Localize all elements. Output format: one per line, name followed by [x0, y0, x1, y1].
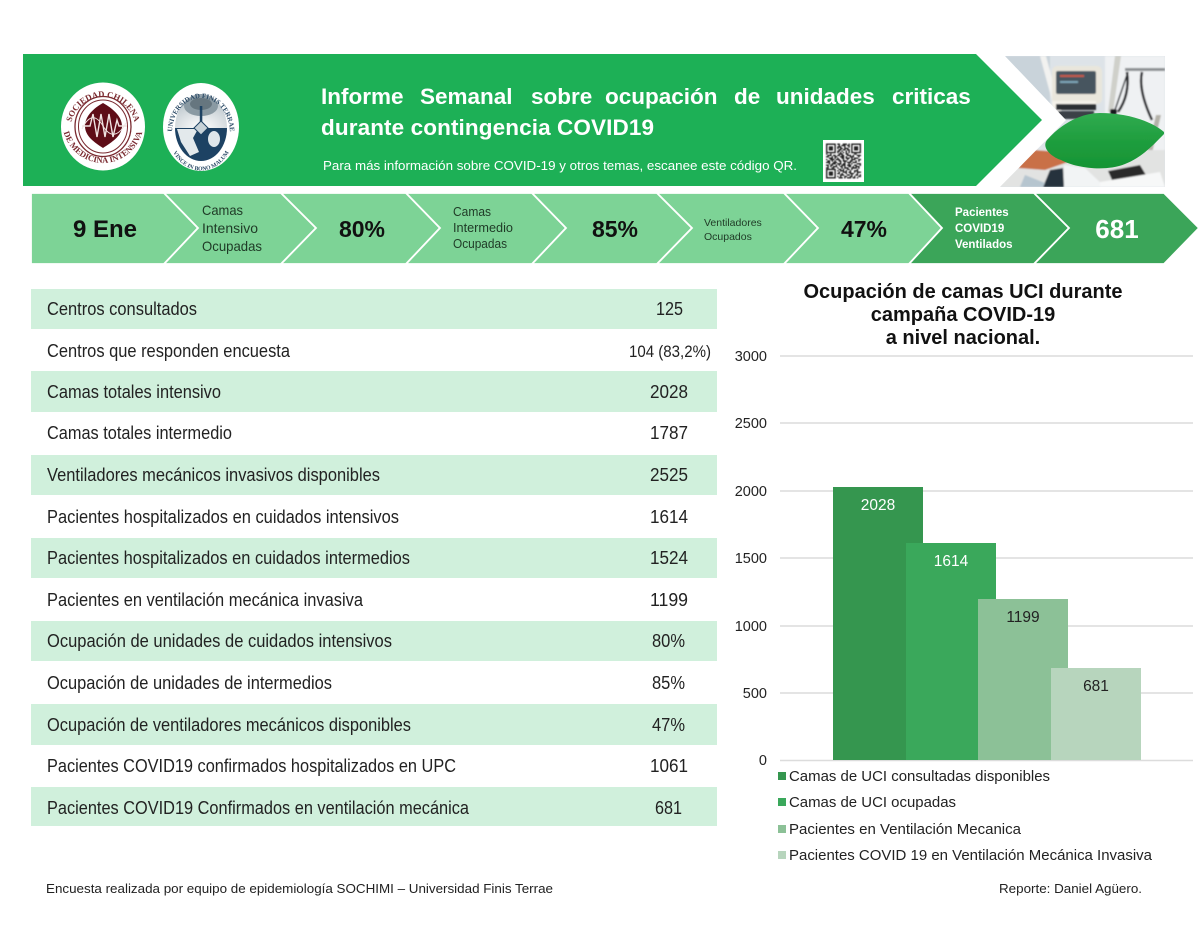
data table: [31, 289, 717, 826]
footer: report author: Reporte: Daniel Agüero.: [999, 882, 1142, 896]
chevron: camas intermedio label: Camas: [453, 205, 491, 219]
row: hospitalizados intensivos: [47, 506, 688, 527]
row: ventiladores disponibles: [31, 455, 717, 495]
chart title: a nivel nacional.: [886, 327, 1040, 349]
logo: Sociedad Chilena de Medicina Intensiva: SOCIEDAD CHILENA: [66, 91, 140, 122]
row: centros que responden: Centros que responden encuesta: [47, 340, 291, 361]
row: camas totales intensivo: Camas totales intensivo: [47, 381, 221, 402]
row: hospitalizados intermedios: Pacientes hospitalizados en cuidados intermedios: [47, 547, 410, 568]
bar: pacientes COVID ventilados: 681: [1083, 678, 1109, 695]
row: ventilación invasiva: [47, 589, 688, 610]
bar: camas disponibles: [833, 487, 923, 760]
row: COVID19 ventilación: [31, 787, 717, 826]
chevron: pacientes ventilados label: COVID19: [955, 223, 1004, 235]
row: COVID19 ventilación: Pacientes COVID19 Confirmados en ventilación mecánica: [47, 797, 470, 818]
y axis labels: 500: [743, 686, 767, 702]
report title line 2: durante contingencia COVID19: [321, 115, 654, 140]
row: ocupación intermedios: [47, 672, 685, 693]
row: centros que responden: [47, 340, 711, 361]
chevron: 47%: [784, 193, 942, 264]
logo: Sociedad Chilena de Medicina Intensiva: [61, 82, 145, 170]
chevron: 85%: [532, 193, 692, 264]
chevron: camas intermedio label: Ocupadas: [453, 237, 507, 251]
report title: sobre: [531, 84, 592, 109]
chevron: pacientes ventilados label: [909, 193, 1069, 264]
chevron: 681: [1034, 193, 1199, 264]
bar: camas ocupadas: 1614: [934, 553, 969, 570]
report title: de: [734, 84, 760, 109]
row: hospitalizados intermedios: [31, 538, 717, 578]
row: hospitalizados intensivos: Pacientes hospitalizados en cuidados intensivos: [47, 506, 399, 527]
row: ocupación intermedios: Ocupación de unidades de intermedios: [47, 672, 332, 693]
row: centros consultados: [31, 289, 717, 329]
bar: camas disponibles: 2028: [861, 497, 895, 514]
logo: Sociedad Chilena de Medicina Intensiva: DE MEDICINA INTENSIVA: [64, 130, 142, 164]
row: ocupación ventiladores: Ocupación de ventiladores mecánicos disponibles: [47, 714, 411, 735]
row: hospitalizados intermedios: 1524: [650, 547, 688, 568]
chevron: camas intensivo label: [164, 193, 316, 264]
chart title: campaña COVID-19: [871, 304, 1055, 326]
logo: Universidad Finis Terrae: UNIVERSIDAD FINIS TERRAE: [168, 94, 234, 132]
footer: survey credit: Encuesta realizada por equipo de epidemiología SOCHIMI – Universidad Finis Terrae: [46, 882, 553, 896]
row: centros consultados: 125: [656, 298, 683, 319]
row: hospitalizados intensivos: 1614: [650, 506, 688, 527]
row: COVID19 hospitalizados: 1061: [650, 755, 688, 776]
row: camas totales intermedio: 1787: [650, 422, 688, 443]
QR code: [823, 140, 864, 182]
logo: Universidad Finis Terrae: VINCE IN BONO MALUM: [174, 150, 229, 170]
chevron: camas intensivo label: Intensivo: [202, 220, 258, 236]
row: COVID19 ventilación: 681: [655, 797, 682, 818]
bar: pacientes ventilados: 1199: [1006, 609, 1040, 626]
row: ventiladores disponibles: Ventiladores mecánicos invasivos disponibles: [47, 464, 380, 485]
y axis labels: 2500: [735, 416, 767, 432]
banner arrow background: [23, 54, 1042, 186]
report title: Informe: [321, 84, 404, 109]
row: ventilación invasiva: 1199: [650, 589, 688, 610]
row: camas totales intermedio: Camas totales intermedio: [47, 422, 232, 443]
header banner: [23, 54, 1165, 187]
bar: camas ocupadas: [906, 543, 996, 760]
chart legend: [778, 769, 1153, 864]
chevron: 80%: 80%: [339, 216, 385, 242]
chevron: 80%: [281, 193, 440, 264]
chevron: camas intensivo label: Ocupadas: [202, 238, 262, 254]
chevron: date: 9 Ene: [73, 216, 137, 243]
row: camas totales intermedio: [47, 422, 688, 443]
legend item 1: Camas de UCI consultadas disponibles: [789, 769, 1050, 785]
chart title: Ocupación de camas UCI durante: [804, 281, 1122, 303]
y axis labels: 0: [759, 753, 767, 769]
legend item 2: Camas de UCI ocupadas: [789, 795, 956, 811]
logo: Universidad Finis Terrae: [163, 83, 239, 171]
row: ocupación intermedios: 85%: [652, 672, 685, 693]
QR instruction text: Para más información sobre COVID-19 y otros temas, escanee este código QR.: [323, 158, 797, 173]
KPI chevron strip: [31, 193, 1199, 264]
chevron: 47%: 47%: [841, 216, 887, 242]
chevron: pacientes ventilados label: Ventilados: [955, 239, 1013, 251]
chevron: ventiladores label: Ocupados: [704, 231, 752, 243]
y axis labels: [735, 349, 767, 769]
row: centros que responden: 104 (83,2%): [629, 343, 711, 361]
report title: ocupación: [605, 84, 718, 109]
report title: unidades: [776, 84, 875, 109]
chevron: pacientes ventilados label: Pacientes: [955, 207, 1009, 219]
report title: Semanal: [420, 84, 513, 109]
chevron: ventiladores label: Ventiladores: [704, 217, 762, 229]
bar chart: [735, 349, 1193, 769]
report title: criticas: [892, 84, 971, 109]
chevron: camas intensivo label: Camas: [202, 202, 243, 218]
y axis labels: 2000: [735, 484, 767, 500]
y axis labels: 1500: [735, 551, 767, 567]
chevron: camas intermedio label: Intermedio: [453, 221, 513, 235]
legend item 4: Pacientes COVID 19 en Ventilación Mecánica Invasiva: [789, 848, 1153, 864]
row: COVID19 hospitalizados: Pacientes COVID19 confirmados hospitalizados en UPC: [47, 755, 456, 776]
row: ocupación intensivos: 80%: [652, 630, 685, 651]
chevron: date: [31, 193, 198, 264]
row: ventiladores disponibles: 2525: [650, 464, 688, 485]
chevron: 681: 681: [1095, 214, 1139, 244]
legend item 3: Pacientes en Ventilación Mecanica: [789, 822, 1022, 838]
row: camas totales intensivo: [31, 371, 717, 412]
y axis labels: 3000: [735, 349, 767, 365]
row: ocupación intensivos: [31, 621, 717, 661]
row: ocupación ventiladores: 47%: [652, 714, 685, 735]
bar: pacientes COVID ventilados: [1051, 668, 1141, 760]
row: camas totales intensivo: 2028: [650, 381, 688, 402]
chevron: camas intermedio label: [406, 193, 566, 264]
row: ocupación ventiladores: [31, 704, 717, 745]
bar: pacientes ventilados: [978, 599, 1068, 760]
green resuscitator bag: [1045, 113, 1164, 168]
row: centros consultados: Centros consultados: [47, 298, 197, 319]
y axis labels: 1000: [735, 619, 767, 635]
chevron: 85%: 85%: [592, 216, 638, 242]
ventilator photo: [1000, 56, 1165, 187]
row: ocupación intensivos: Ocupación de unidades de cuidados intensivos: [47, 630, 392, 651]
row: ventilación invasiva: Pacientes en ventilación mecánica invasiva: [47, 589, 364, 610]
chevron: ventiladores label: [657, 193, 818, 264]
